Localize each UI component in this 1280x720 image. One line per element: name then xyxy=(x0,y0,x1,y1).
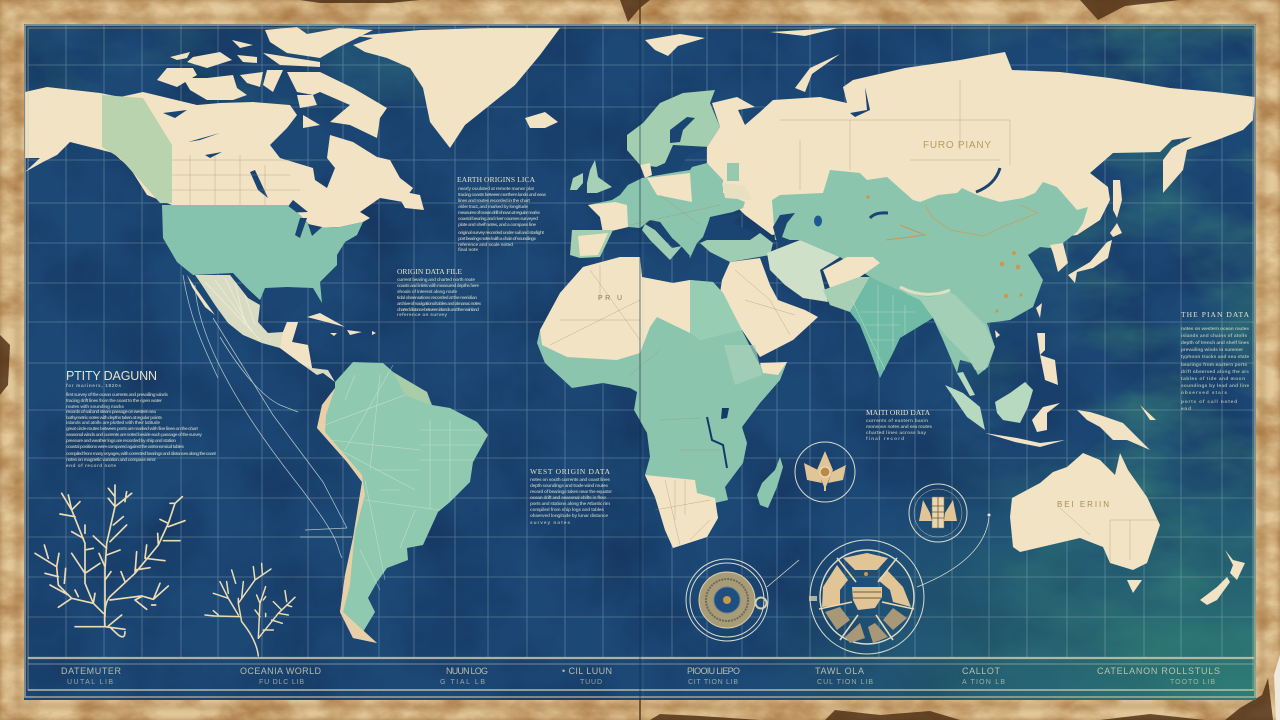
bottom legend band: OCEANIA WORLD xyxy=(240,666,322,676)
text block: south atlantic: record of bearings taken near the equator xyxy=(530,489,612,495)
iceland and svalbard xyxy=(525,28,840,128)
text block: pacific: routes with sounding marks xyxy=(66,404,124,410)
text block: indian ocean: MAITI ORID DATA xyxy=(866,408,931,417)
text block: north atlantic: lines and routes recorded in the chart xyxy=(458,198,530,204)
map labels: FURO PIANY xyxy=(923,140,991,151)
compass icon: satellite emblem xyxy=(909,484,967,542)
text block: south atlantic: WEST ORIGIN DATA xyxy=(530,467,611,476)
text block: indian ocean: final record xyxy=(866,436,904,442)
india xyxy=(850,277,933,378)
bottom legend band xyxy=(61,666,1220,686)
russia xyxy=(707,52,1255,240)
bottom legend band: CIT TION LIB xyxy=(688,679,738,686)
bottom legend band: G TIAL LB xyxy=(440,679,485,686)
text block: pacific: bathymetric notes with depths taken at regular points xyxy=(66,415,162,421)
bottom legend band: CATELANON ROLLSTULS xyxy=(1097,666,1220,676)
text block: east pacific: prevailing winds in summer xyxy=(1181,347,1243,353)
text block: mid atlantic: reference on survey xyxy=(397,312,447,318)
text block: pacific: PTITY DAGUNN xyxy=(66,369,157,383)
text block: mid atlantic: current bearing and charted north route xyxy=(397,277,475,283)
text block: north atlantic: reference and scale noted xyxy=(458,242,513,248)
text block: south atlantic xyxy=(530,467,612,526)
greenland xyxy=(353,28,560,148)
text block: south atlantic: depth soundings and trade wind routes xyxy=(530,483,608,489)
text block: north atlantic: tracing coasts between northern lands and seas xyxy=(458,192,546,198)
text block: south atlantic: survey notes xyxy=(530,520,570,526)
text block: pacific: for mariners, 1820s xyxy=(66,383,121,389)
iberia xyxy=(570,230,613,258)
italy xyxy=(642,224,682,260)
mexico and central america xyxy=(187,275,335,382)
concentric dial diagram xyxy=(686,559,799,641)
north america: canada and alaska xyxy=(25,27,424,228)
centre fold xyxy=(640,25,643,700)
text block: north atlantic: older tract, and marked by longitude xyxy=(458,204,528,210)
iran xyxy=(767,240,840,302)
madagascar xyxy=(757,457,783,508)
bottom legend band: PIOOIU LIEPO xyxy=(687,666,740,676)
text block: east pacific: soundings by lead and line xyxy=(1181,383,1249,389)
text block: pacific xyxy=(66,369,216,469)
map labels xyxy=(598,140,1109,509)
text block: north atlantic: EARTH ORIGINS LICA xyxy=(457,175,536,184)
bottom legend band: TOOTO LIB xyxy=(1170,679,1215,686)
text block: mid atlantic: charted distance between islands and the mainland xyxy=(397,307,479,313)
text block: mid atlantic: tidal observations recorded at the meridian xyxy=(397,295,477,301)
text block: north atlantic: measures of ocean drift shown at regular marks xyxy=(458,210,540,216)
turkey xyxy=(700,233,773,262)
bottom legend band: TAWL OLA xyxy=(815,666,864,676)
bottom legend band: UUTAL LIB xyxy=(67,679,113,686)
text block: east pacific: end xyxy=(1181,406,1191,412)
british isles xyxy=(570,160,612,193)
text block: pacific: end of record note xyxy=(66,463,116,469)
southeast asian islands xyxy=(945,303,1156,450)
scandinavia and finland xyxy=(627,90,720,178)
text block: north atlantic: coastal bearing and river courses surveyed xyxy=(458,216,538,222)
text block: east pacific: bearings from eastern ports xyxy=(1181,362,1247,368)
text block: north atlantic: port bearings noted with a chain of soundings xyxy=(458,236,536,242)
text block: east pacific: drift observed along the arc xyxy=(1181,369,1249,375)
compass icon: moth emblem xyxy=(795,442,855,502)
text block: east pacific: depth of trench and shelf lines xyxy=(1181,340,1249,346)
australia xyxy=(1010,453,1160,593)
text block: south atlantic: observed longitude by lunar distance xyxy=(530,513,608,519)
text block: pacific: records of sail and steam passage on western sea xyxy=(66,409,156,415)
text block: mid atlantic: coasts and inlets with measured depths here xyxy=(397,283,479,289)
text block: north atlantic: final note xyxy=(458,247,478,253)
text block: pacific: seasonal winds and currents are noted beside each passage of the survey xyxy=(66,432,202,438)
afghanistan xyxy=(823,257,880,288)
arabia xyxy=(720,258,818,357)
text block: indian ocean: currents of eastern basin xyxy=(866,418,928,424)
bottom legend band: TUUD xyxy=(580,679,602,686)
united states xyxy=(162,205,363,303)
text block: south atlantic: notes on south currents and coast lines xyxy=(530,477,610,483)
text block: indian ocean: monsoon notes and sea routes xyxy=(866,424,932,430)
bottom legend band: • CIL LUUN xyxy=(562,666,612,676)
bottom legend band: NUUN LOG xyxy=(446,666,488,676)
map labels: PR U xyxy=(598,295,622,302)
text block: indian ocean: charted lines across bay xyxy=(866,430,926,436)
text block: mid atlantic: archive of navigational tables and almanac notes xyxy=(397,301,481,307)
text block: mid atlantic: ORIGIN DATA FILE xyxy=(397,267,462,276)
illustration: branching coral small xyxy=(205,563,295,656)
text block: east pacific: tables of tide and moon xyxy=(1181,376,1245,382)
text block: mid atlantic xyxy=(397,267,481,318)
text block: north atlantic xyxy=(457,175,546,253)
text block: east pacific: ports of call noted xyxy=(1181,399,1237,405)
text block: mid atlantic: shoals of interest along route xyxy=(397,289,457,295)
text block: pacific: compiled from many voyages, with corrected bearings and distances along the coast xyxy=(66,451,216,457)
text block: pacific: islands and atolls are plotted with their latitude xyxy=(66,420,160,426)
map labels: BEI ERIIN xyxy=(1057,500,1109,509)
text block: pacific: tracing drift lines from the coast to the open water xyxy=(66,398,162,404)
text block: indian ocean xyxy=(866,408,932,442)
new zealand xyxy=(1200,550,1245,605)
text block: pacific: notes on magnetic variation and compass error xyxy=(66,457,156,463)
text block: south atlantic: ports and stations along the Atlantic rim xyxy=(530,501,610,507)
black and caspian seas xyxy=(703,213,798,260)
text block: east pacific: islands and chains of atolls xyxy=(1181,333,1247,339)
text block: east pacific: notes on western ocean routes xyxy=(1181,326,1249,332)
pakistan xyxy=(823,277,870,312)
arctic islands xyxy=(157,27,424,210)
segmented wheel diagram xyxy=(809,514,990,654)
central and east asia xyxy=(772,168,1088,375)
text block: north atlantic: original survey recorded under sail and starlight xyxy=(458,230,544,236)
bottom legend band: A TION LB xyxy=(962,679,1005,686)
bottom legend band: CUL TION LIB xyxy=(817,679,873,686)
text block: north atlantic: nearly oculated at remote manor plat xyxy=(458,186,534,192)
european mainland xyxy=(588,163,752,262)
text block: east pacific: THE PIAN DATA xyxy=(1181,310,1250,319)
caribbean islands xyxy=(307,313,376,336)
text block: south atlantic: compiled from ship logs and tables xyxy=(530,507,604,513)
text block: pacific: first survey of the ocean currents and prevailing winds xyxy=(66,392,168,398)
text block: pacific: pressure and weather logs are recorded by ship and station xyxy=(66,438,176,444)
text block: east pacific: observed stars xyxy=(1181,390,1227,396)
illustration: branching coral large xyxy=(35,485,185,637)
south america xyxy=(317,362,488,643)
text block: north atlantic: plate and shelf notes, and a compass line xyxy=(458,222,536,228)
text block: east pacific xyxy=(1181,310,1250,412)
text block: south atlantic: ocean drift and seasonal shifts in flow xyxy=(530,495,606,501)
text block: pacific: great circle routes between ports are marked with fine lines on the chart xyxy=(66,426,198,432)
japan korea sakhalin xyxy=(1050,180,1122,283)
africa xyxy=(537,257,787,548)
bottom legend band: FU DLC LIB xyxy=(259,679,304,686)
bottom legend band: CALLOT xyxy=(962,666,1000,676)
text block: pacific: coastal positions were compared against the astronomical tables xyxy=(66,444,184,450)
bottom legend band: DATEMUTER xyxy=(61,666,122,676)
pacific route lines xyxy=(183,275,352,558)
text block: east pacific: typhoon tracks and sea state xyxy=(1181,354,1249,360)
